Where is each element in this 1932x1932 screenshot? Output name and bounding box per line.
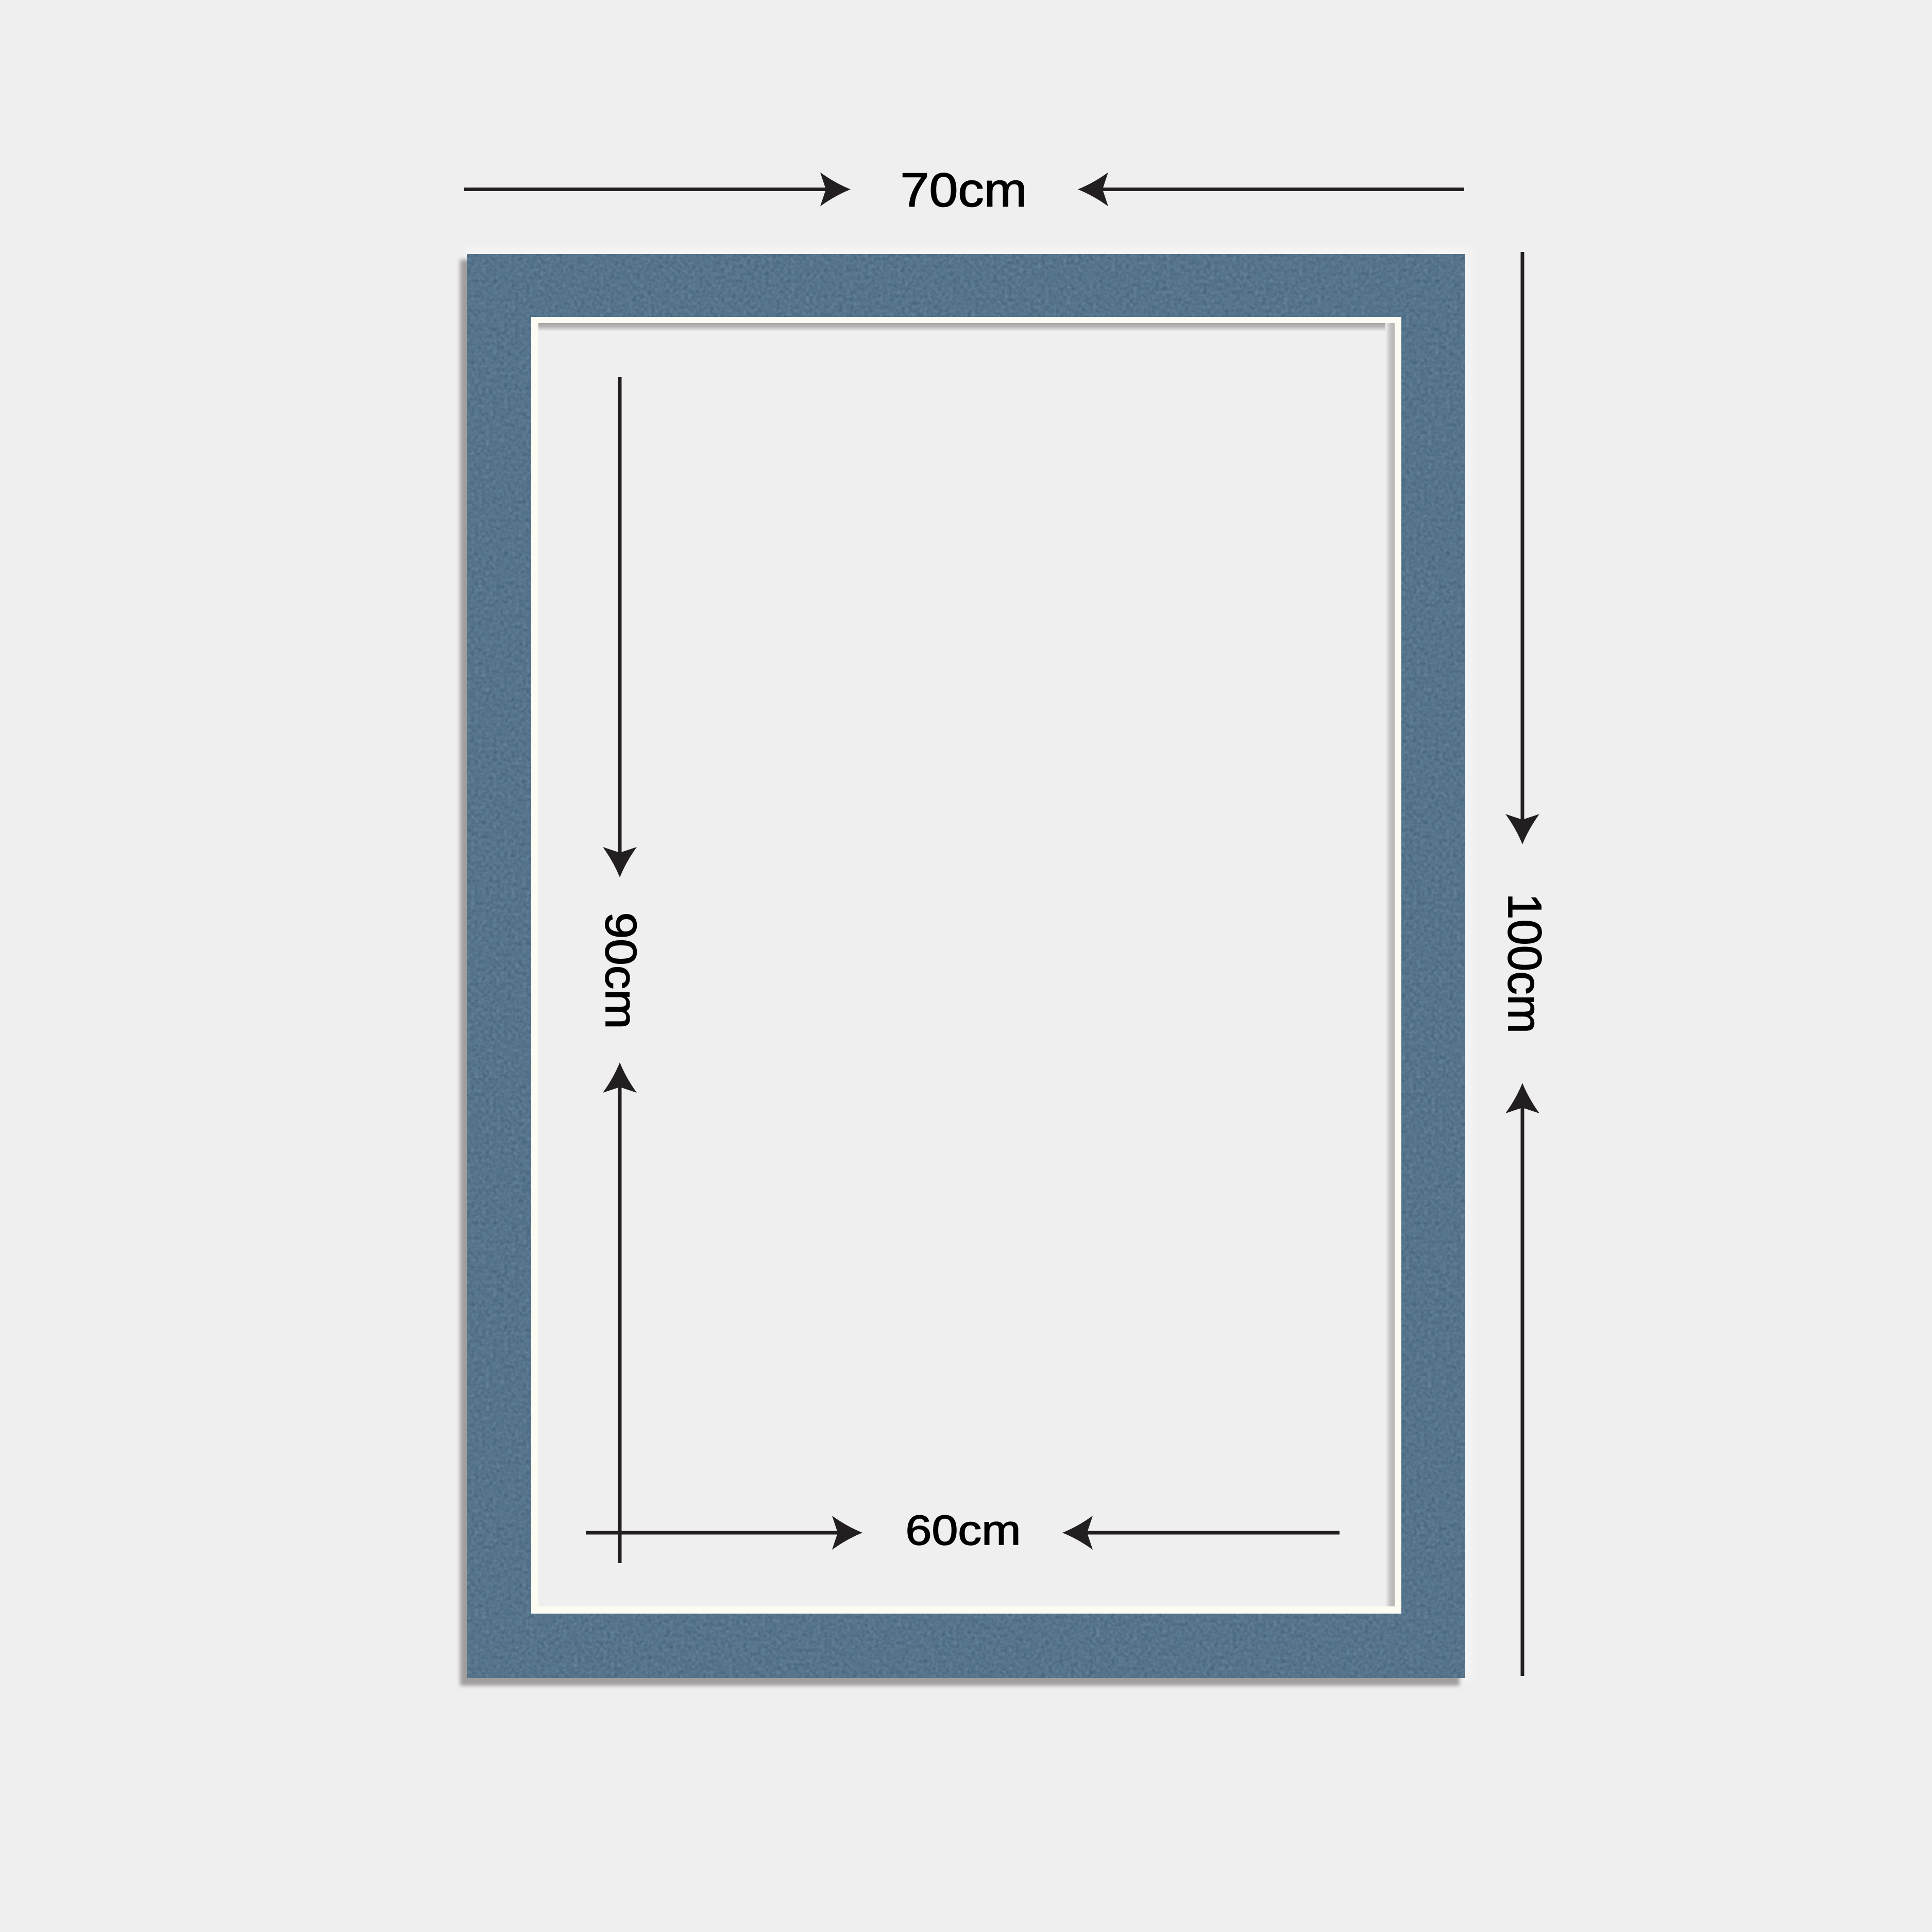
dimension: outer width 70cm: [464, 163, 1464, 216]
dimension: inner height 90cm: [596, 377, 645, 1563]
arrow: bottom right pointing left: [1062, 1516, 1340, 1550]
arrow: bottom left pointing right: [586, 1516, 862, 1550]
arrow: right lower pointing up: [1505, 1083, 1539, 1676]
dimension: inner width 60cm: [586, 1507, 1340, 1554]
dimension: outer height 100cm: [1498, 252, 1551, 1676]
panel: mat board: [460, 247, 1471, 1686]
arrow: top left pointing right: [464, 172, 851, 206]
arrow: right upper pointing down: [1505, 252, 1539, 844]
label: 100cm: 100cm: [1498, 893, 1551, 1033]
arrow: inner lower pointing up: [603, 1062, 637, 1563]
label: 70cm: 70cm: [901, 163, 1027, 216]
label: 60cm: 60cm: [906, 1507, 1021, 1554]
arrow: inner upper pointing down: [603, 377, 637, 877]
arrow: top right pointing left: [1078, 172, 1464, 206]
label: 90cm: 90cm: [596, 912, 645, 1029]
